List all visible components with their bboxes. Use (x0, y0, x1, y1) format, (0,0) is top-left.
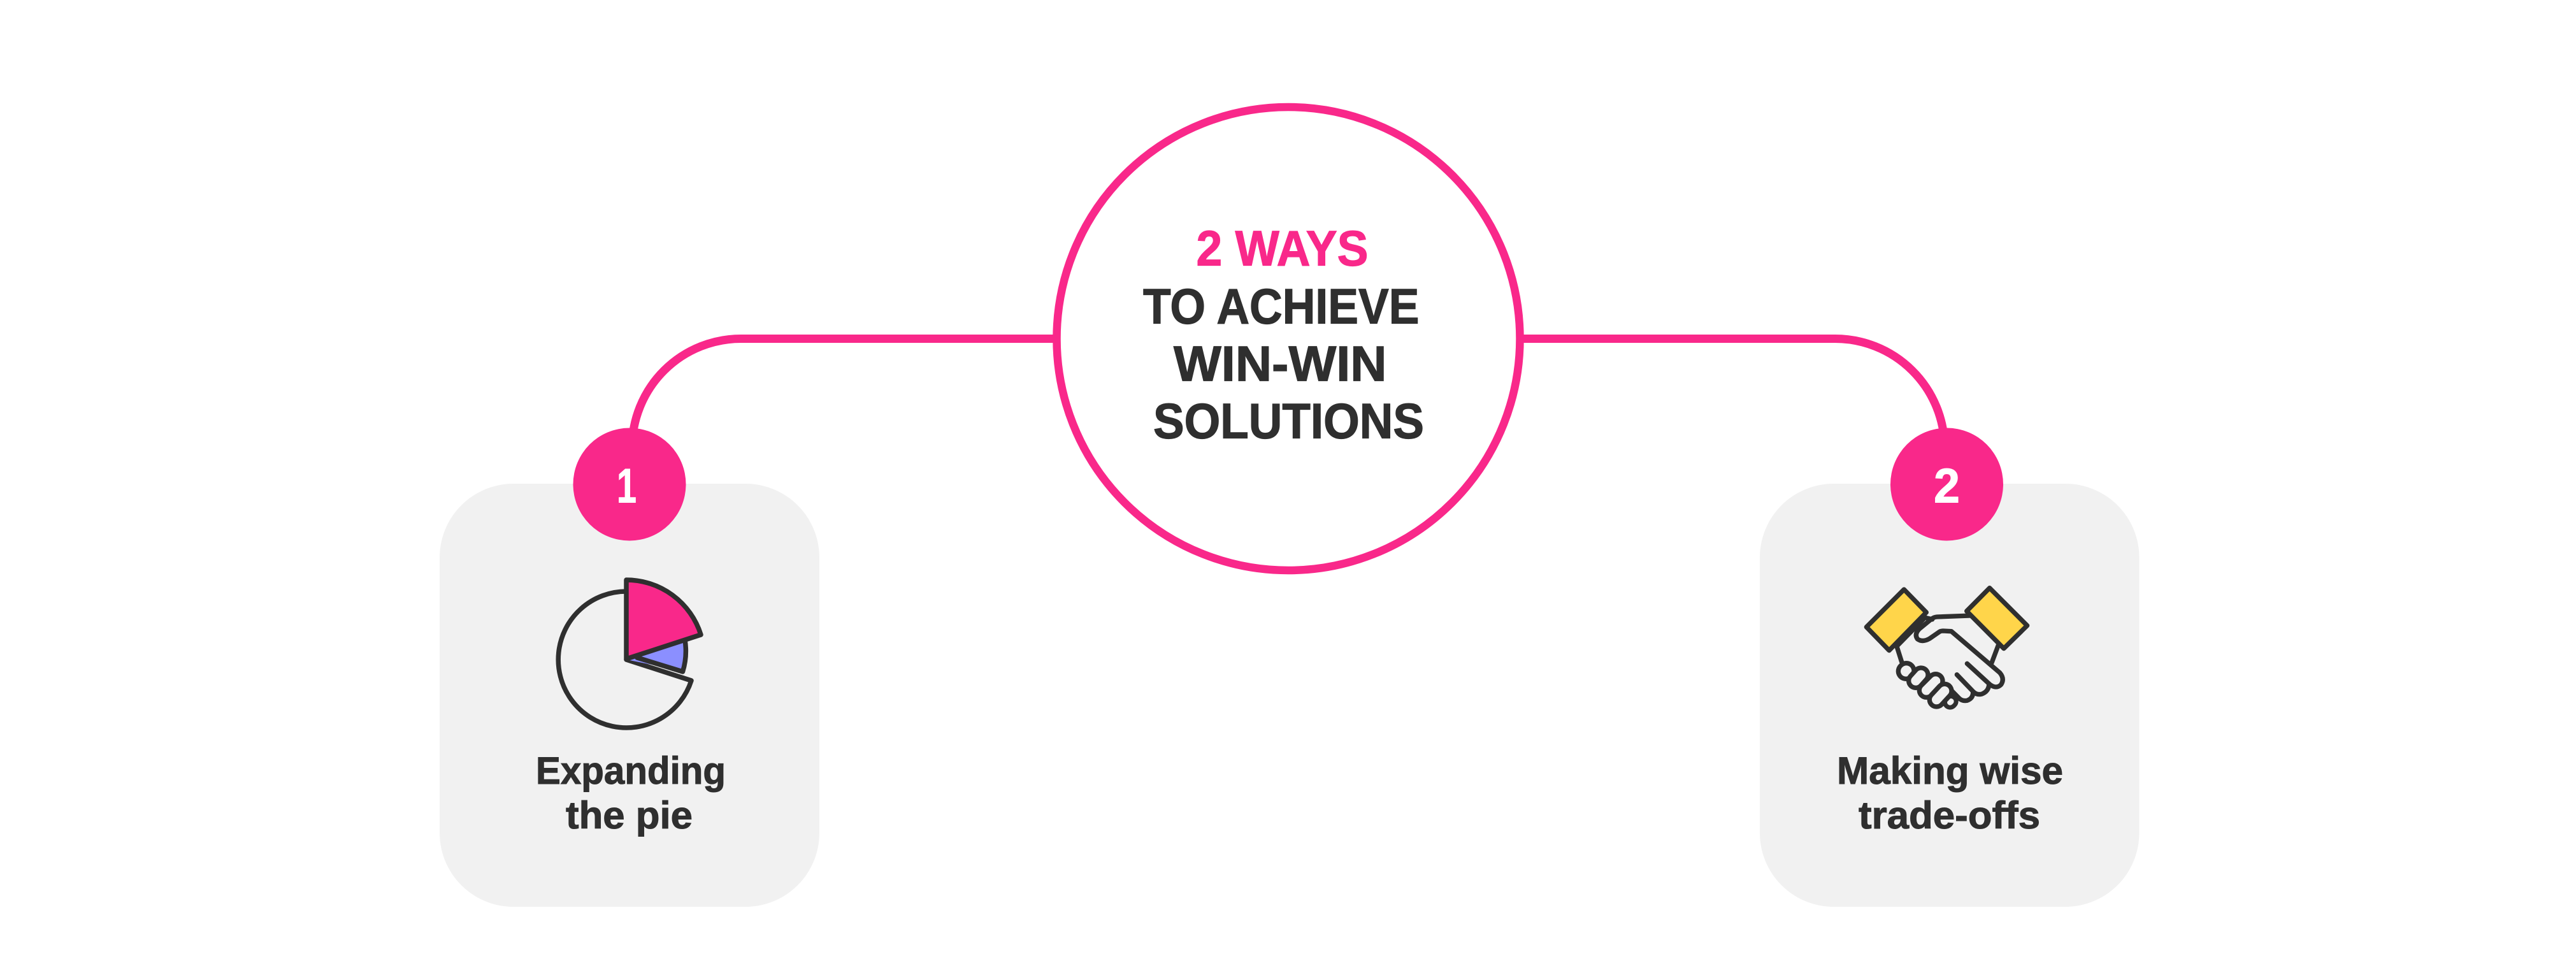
finger capsules (1906, 671, 1951, 702)
panel: making wise trade-offs card (1760, 484, 2140, 907)
pie base (558, 591, 691, 728)
panel: expanding the pie card (440, 484, 819, 907)
badge 2 (1890, 428, 2003, 540)
title: SOLUTIONS (1153, 393, 1424, 449)
label: making wise trade-offs: trade-offs (1859, 794, 2040, 837)
title: 2 WAYS (1197, 220, 1369, 277)
central circle (1056, 107, 1520, 570)
label: expanding the pie: Expanding (536, 749, 726, 792)
icon: pie chart (558, 580, 701, 728)
blue slice outline (637, 640, 686, 672)
lower fingers (1957, 675, 1989, 695)
badge 1 (573, 428, 686, 540)
label: making wise trade-offs: Making wise (1837, 749, 2063, 792)
pink slice (626, 580, 701, 659)
wrist lines (1897, 618, 1999, 663)
label: expanding the pie (536, 749, 726, 837)
title: TO ACHIEVE (1143, 278, 1420, 334)
icon: handshake (1866, 588, 2027, 702)
badge 1: 1 (617, 459, 637, 514)
left hand back (1897, 618, 1925, 646)
title (1143, 220, 1424, 449)
title: WIN-WIN (1174, 335, 1386, 391)
label: making wise trade-offs (1837, 749, 2063, 837)
connector: circle to card 1 (632, 339, 1058, 447)
label: expanding the pie: the pie (566, 794, 693, 837)
right cuff (1967, 588, 2027, 649)
badge 2: 2 (1934, 459, 1960, 514)
left cuff (1866, 589, 1926, 651)
upper hand (1916, 616, 2003, 687)
connector: circle to card 2 (1520, 339, 1945, 447)
blue slice (626, 640, 686, 671)
